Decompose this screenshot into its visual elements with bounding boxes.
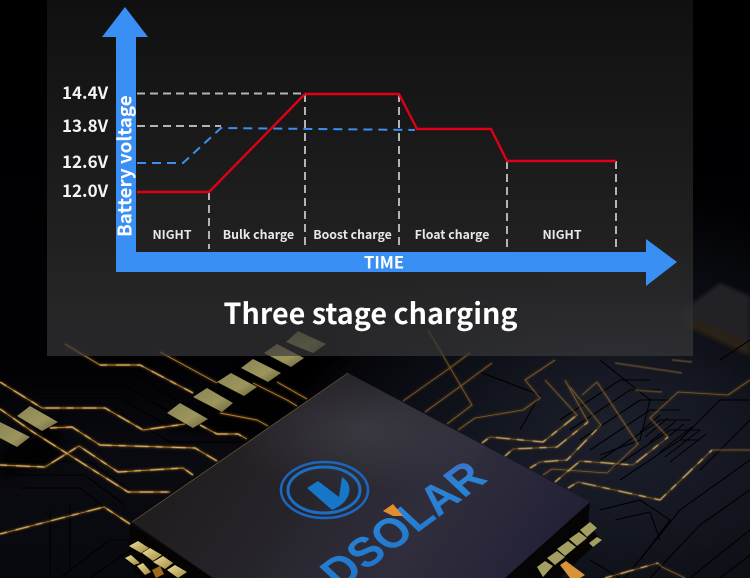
axes arrows xyxy=(102,7,677,286)
stage labels: Boost charge xyxy=(313,225,392,243)
y axis values: 14.4V xyxy=(62,79,109,104)
dark pad shadows xyxy=(0,340,345,480)
guide lines xyxy=(137,94,616,251)
chip xyxy=(125,373,602,578)
faded upper traces xyxy=(615,360,692,392)
title: Three stage charging xyxy=(224,292,517,333)
gold pads xyxy=(0,331,326,447)
red charging curve xyxy=(137,94,616,192)
stage labels xyxy=(152,225,582,243)
y axis values: 13.8V xyxy=(62,112,109,137)
chip pins left xyxy=(125,524,213,578)
blurred distant chip xyxy=(679,283,750,356)
dark circuit tracks xyxy=(10,340,750,578)
y axis values: 12.0V xyxy=(62,177,109,202)
panel: translucent chart backdrop xyxy=(47,0,693,356)
y axis values xyxy=(62,79,109,202)
stage labels: Bulk charge xyxy=(223,225,294,243)
trace highlights xyxy=(0,365,712,578)
y axis title: Battery voltage xyxy=(110,95,138,237)
glowing gold traces: right xyxy=(403,330,750,578)
chip pins right xyxy=(505,502,602,578)
blue dashed line: 12.6V to 13.8V xyxy=(137,128,415,163)
chip top face xyxy=(132,373,590,578)
stage labels: NIGHT xyxy=(152,225,192,243)
y axis values: 12.6V xyxy=(62,148,109,173)
stage labels: Float charge xyxy=(415,225,489,243)
x axis title: TIME xyxy=(364,250,404,274)
line chart xyxy=(62,7,677,286)
glowing gold traces: left xyxy=(0,344,307,534)
stage labels: NIGHT xyxy=(542,225,582,243)
logo emblem xyxy=(281,462,368,518)
